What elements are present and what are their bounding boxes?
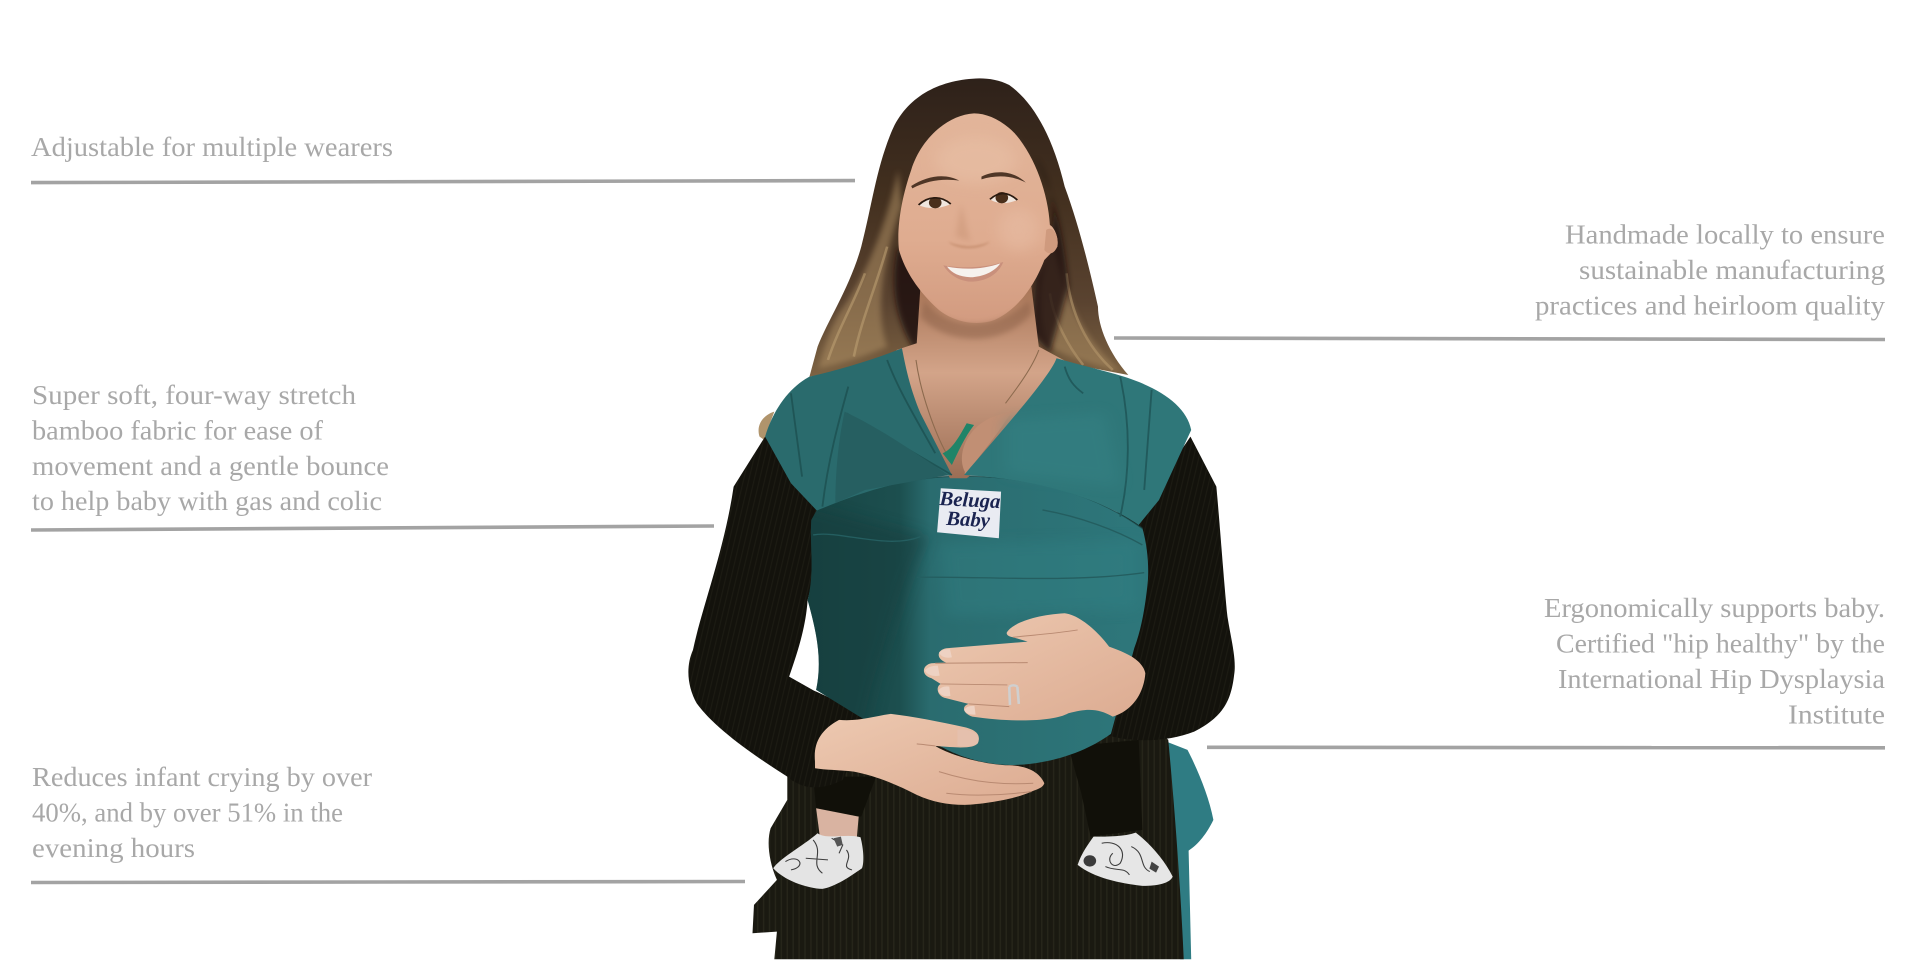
callout: crying xyxy=(31,762,745,882)
callout: handmade: practices and heirloom quality xyxy=(1535,290,1886,320)
dress, arms and baby, positioned in lower-body coordinates xyxy=(688,437,1235,959)
callout: ergonomic: Ergonomically supports baby. xyxy=(1544,593,1885,623)
lower hand xyxy=(815,714,1044,805)
logo text: Beluga xyxy=(938,488,1001,513)
callout: adjustable: Adjustable for multiple wearers xyxy=(31,132,393,162)
face xyxy=(898,113,1058,339)
smile xyxy=(943,262,1003,282)
nose xyxy=(948,242,990,248)
neck shadow xyxy=(920,300,1031,339)
callout: fabric: bamboo fabric for ease of xyxy=(32,416,323,446)
ring xyxy=(1009,685,1019,705)
callout: fabric: to help baby with gas and colic xyxy=(32,486,382,516)
callout: crying: evening hours xyxy=(32,833,195,863)
right baby shoe xyxy=(1078,833,1173,886)
cheek light xyxy=(998,208,1039,252)
upper hand xyxy=(924,613,1145,720)
callout: crying: Reduces infant crying by over xyxy=(32,762,372,792)
callout: handmade: sustainable manufacturing xyxy=(1579,255,1885,285)
callout: ergonomic: International Hip Dysplaysia xyxy=(1558,664,1885,694)
ear xyxy=(1044,229,1058,253)
left sleeve xyxy=(688,437,872,787)
eyebrows xyxy=(911,172,1026,188)
photo: woman wearing teal baby wrap xyxy=(688,78,1235,959)
baby head and wrap edge in the neckline xyxy=(943,410,1013,475)
callout: ergonomic: Certified "hip healthy" by the xyxy=(1556,628,1885,658)
wrap shoulder left xyxy=(765,348,952,511)
callout: ergonomic xyxy=(1207,593,1885,748)
callout: fabric: movement and a gentle bounce xyxy=(32,451,389,481)
dress xyxy=(753,700,1184,959)
baby legs xyxy=(813,740,1142,838)
fabric label with logo xyxy=(937,488,1001,538)
wrap tail xyxy=(1166,742,1213,959)
eyes xyxy=(919,194,1017,208)
neck and chest xyxy=(896,287,1067,478)
necklace xyxy=(916,350,1039,453)
wrap shoulder right xyxy=(964,358,1191,525)
callout: crying: 40%, and by over 51% in the xyxy=(32,798,343,828)
callout: fabric: Super soft, four-way stretch xyxy=(32,380,357,410)
hair xyxy=(759,78,1128,440)
callout: ergonomic: Institute xyxy=(1788,700,1885,730)
callout: handmade: Handmade locally to ensure xyxy=(1565,220,1885,250)
left baby shoe xyxy=(773,833,863,889)
wrap body panel xyxy=(791,476,1148,765)
right sleeve xyxy=(1092,437,1235,740)
callout: handmade xyxy=(1114,220,1886,340)
callout: fabric xyxy=(31,380,714,530)
fabric label with logo: Baby xyxy=(945,508,991,532)
